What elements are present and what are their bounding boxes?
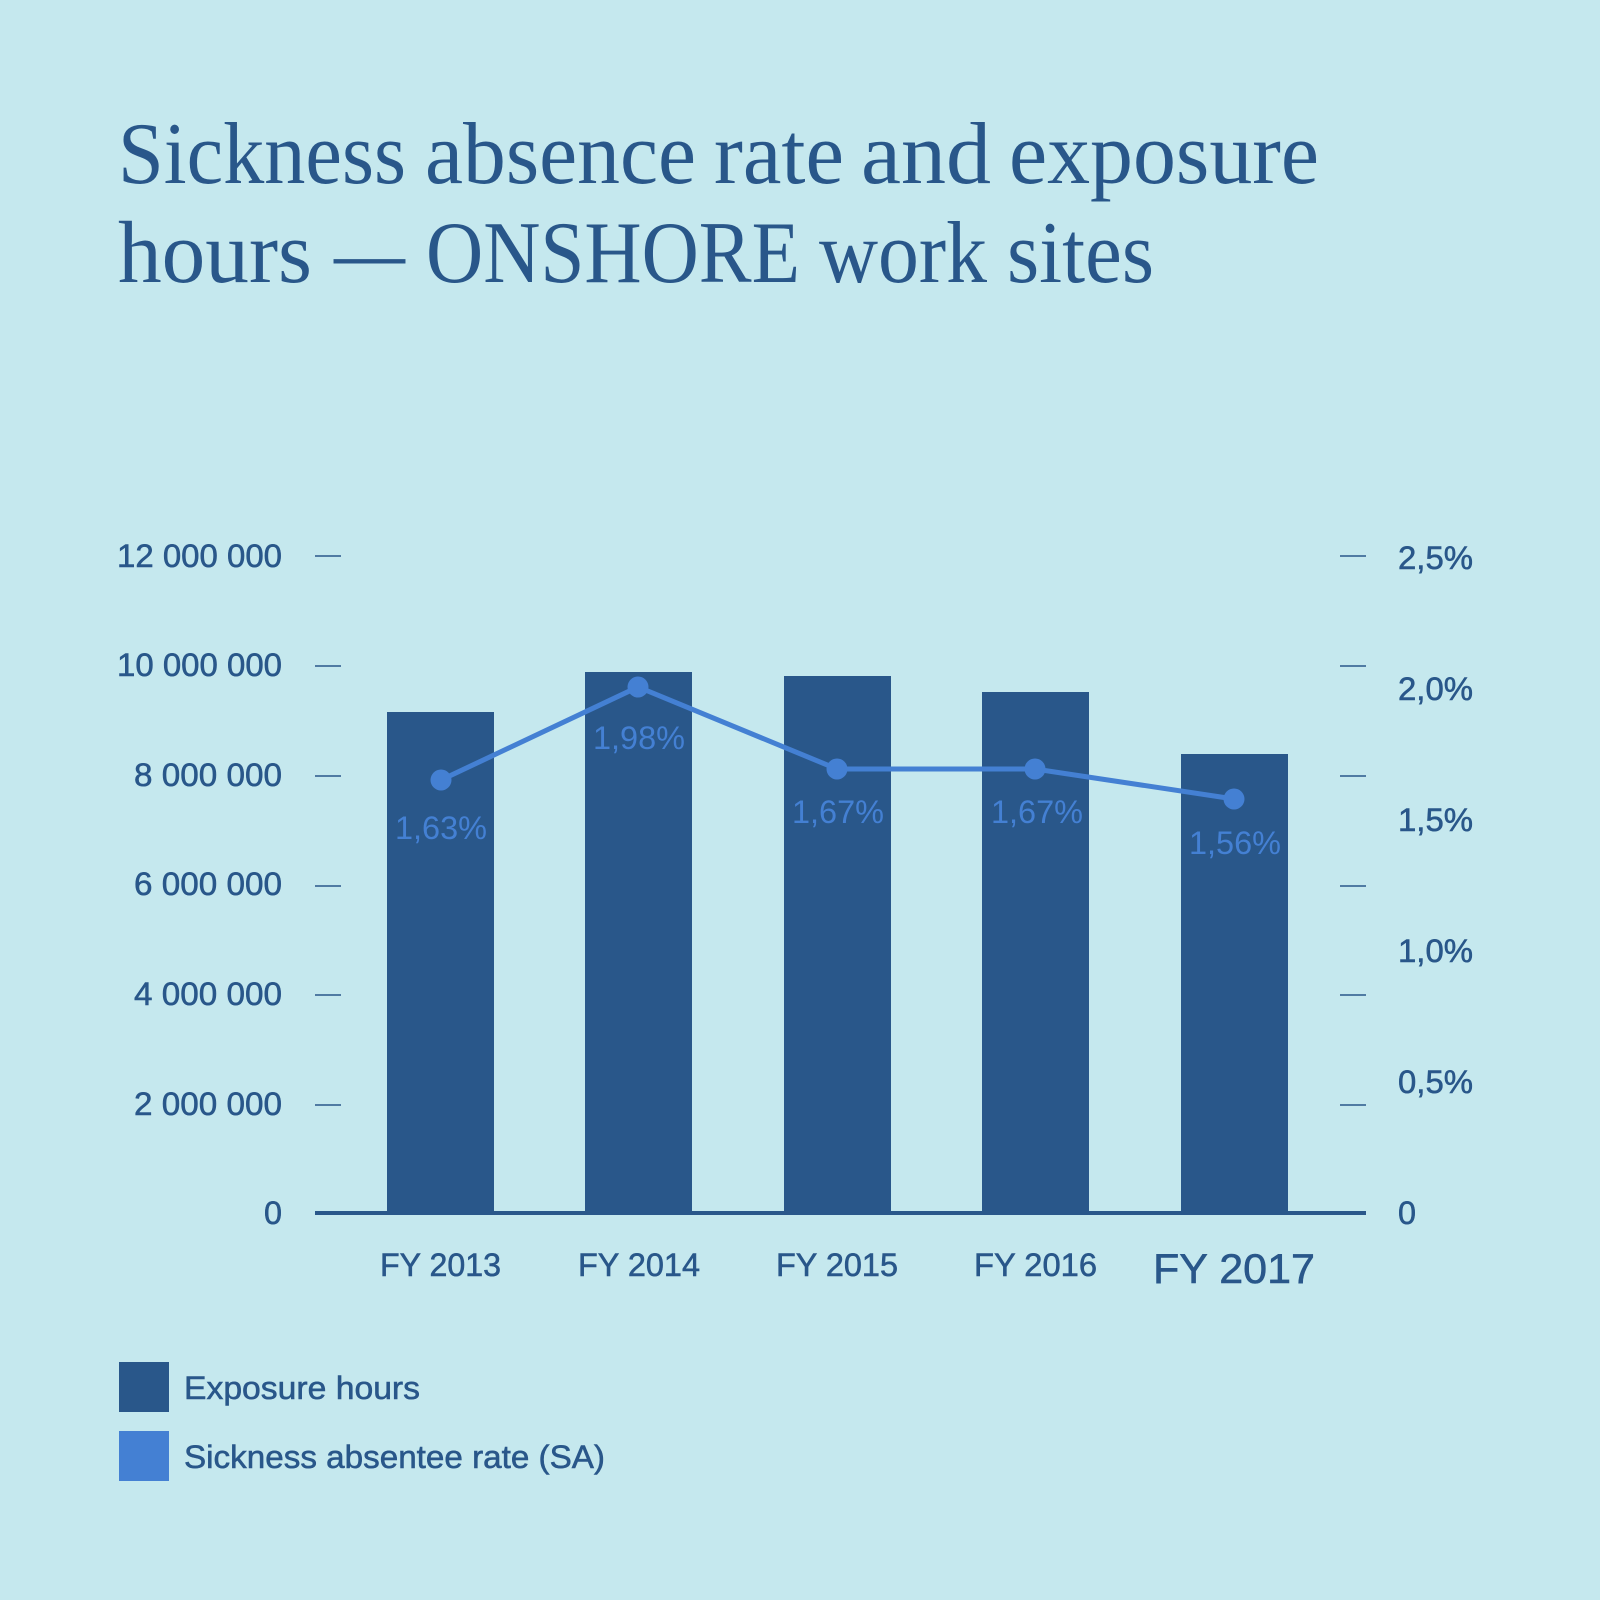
data labels: 1,63% — [395, 810, 487, 846]
title — [118, 106, 1319, 302]
left axis labels: 10 000 000 — [117, 647, 282, 683]
title: ONSHORE — [426, 205, 800, 302]
line chart: sickness absentee rate — [430, 676, 1244, 810]
data labels: 1,67% — [991, 794, 1083, 830]
left axis labels — [117, 538, 282, 1231]
x axis labels — [380, 1245, 1315, 1292]
bar chart: exposure hours — [387, 672, 1288, 1215]
title: rate — [714, 106, 844, 203]
title: Sickness — [118, 106, 406, 203]
right axis labels: 0 — [1398, 1195, 1416, 1231]
right axis labels: 2,5% — [1398, 540, 1473, 576]
x axis labels: FY 2015 — [776, 1247, 898, 1283]
right axis labels: 1,5% — [1398, 802, 1473, 838]
title: exposure — [1009, 106, 1319, 203]
title: — — [333, 205, 406, 302]
legend: Exposure hours — [184, 1370, 420, 1406]
data labels — [395, 720, 1281, 861]
right axis labels — [1398, 540, 1473, 1231]
title: hours — [118, 205, 312, 302]
title: absence — [425, 106, 696, 203]
right axis labels: 0,5% — [1398, 1064, 1473, 1100]
x axis labels: FY 2016 — [974, 1247, 1097, 1283]
x axis labels: FY 2013 — [380, 1247, 501, 1283]
baseline — [315, 1211, 1366, 1215]
data labels: 1,56% — [1189, 825, 1281, 861]
right axis labels: 1,0% — [1398, 933, 1473, 969]
axis ticks — [315, 556, 1366, 1105]
legend — [119, 1362, 605, 1481]
x axis labels: FY 2014 — [578, 1247, 700, 1283]
right axis labels: 2,0% — [1398, 671, 1473, 707]
left axis labels: 0 — [264, 1195, 282, 1231]
title: and — [861, 106, 991, 203]
left axis labels: 4 000 000 — [134, 976, 282, 1012]
left axis labels: 12 000 000 — [117, 538, 282, 574]
title: work — [819, 205, 987, 302]
left axis labels: 2 000 000 — [134, 1086, 282, 1122]
data labels: 1,67% — [792, 794, 884, 830]
title: sites — [1007, 205, 1154, 302]
x axis labels: FY 2017 — [1153, 1245, 1315, 1292]
left axis labels: 8 000 000 — [134, 757, 282, 793]
legend: Sickness absentee rate (SA) — [184, 1439, 605, 1475]
left axis labels: 6 000 000 — [134, 866, 282, 902]
data labels: 1,98% — [593, 720, 685, 756]
